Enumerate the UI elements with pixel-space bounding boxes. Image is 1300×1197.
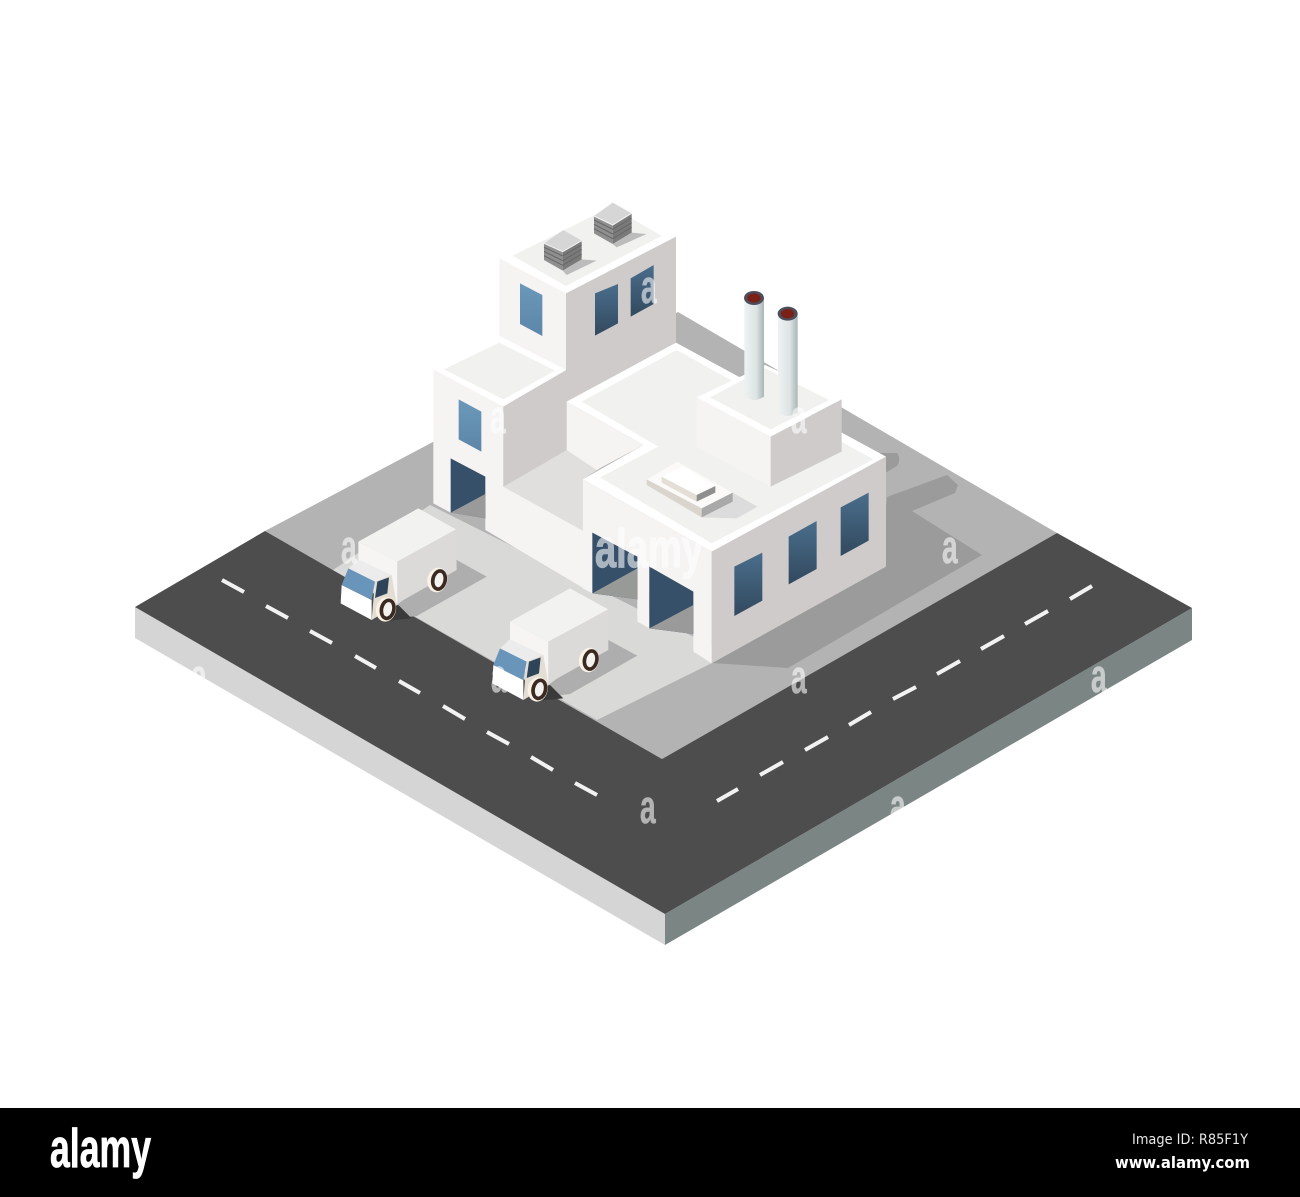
garage door 3 (649, 567, 693, 634)
front block left wall (583, 479, 712, 663)
delivery truck 1 (341, 508, 487, 623)
watermark letters: a (1091, 651, 1107, 703)
road dashes (222, 580, 1092, 801)
website: www.alamy.com (1115, 1153, 1250, 1172)
footer bar (0, 1108, 1300, 1197)
chimney block (697, 365, 842, 487)
building cast shadow on lot (712, 475, 982, 668)
tower right wall (503, 237, 676, 487)
cab (348, 559, 392, 582)
watermark letters: a (942, 522, 958, 574)
shadow (397, 560, 487, 618)
factory building (433, 203, 886, 663)
watermark letters: a (641, 262, 657, 314)
wheels (374, 595, 398, 623)
front block right wall (712, 457, 886, 663)
rooftop AC units (544, 203, 647, 275)
main roof (567, 343, 886, 552)
recessed courtyard (503, 450, 600, 532)
left garage door (451, 458, 485, 518)
L-shaped road (135, 531, 1192, 914)
tower left wall (499, 258, 566, 370)
cab (500, 639, 543, 662)
watermark letters: a (791, 652, 807, 704)
concrete yard (333, 505, 720, 720)
shadow (548, 640, 637, 697)
garage door 2 (592, 533, 637, 599)
slab right side (665, 608, 1192, 945)
tower roof (499, 203, 676, 293)
delivery truck 2 (492, 588, 637, 703)
watermark letters: a (890, 781, 906, 833)
watermark letters: a (491, 651, 507, 703)
chimney shadow blob (880, 453, 899, 476)
wheels (525, 675, 550, 703)
alamy logo: alamy (50, 1117, 151, 1179)
lower left block roof (433, 336, 566, 407)
roof hatch (647, 462, 757, 518)
cargo box (358, 508, 456, 562)
alcove upper wall (567, 402, 643, 470)
watermark letters: a (341, 522, 357, 574)
lower left block wall (433, 369, 593, 594)
chimney left (744, 291, 764, 400)
front block windows (734, 553, 762, 616)
watermark letters: a (191, 651, 207, 703)
watermark letters: a (490, 392, 506, 444)
lower left window (459, 399, 481, 452)
watermark letters: a (640, 782, 656, 834)
watermark wordmark: alamy (595, 517, 703, 579)
parking lot ground (265, 312, 1057, 759)
watermark (191, 262, 1107, 834)
watermark letters: a (791, 392, 807, 444)
chimney right (778, 307, 798, 416)
tower windows (520, 283, 542, 336)
watermark letters (191, 262, 1107, 834)
slab left side (135, 607, 665, 945)
isometric base slab (135, 312, 1192, 945)
image id: Image ID: R85F1Y (1132, 1132, 1248, 1148)
cargo box (510, 588, 608, 642)
